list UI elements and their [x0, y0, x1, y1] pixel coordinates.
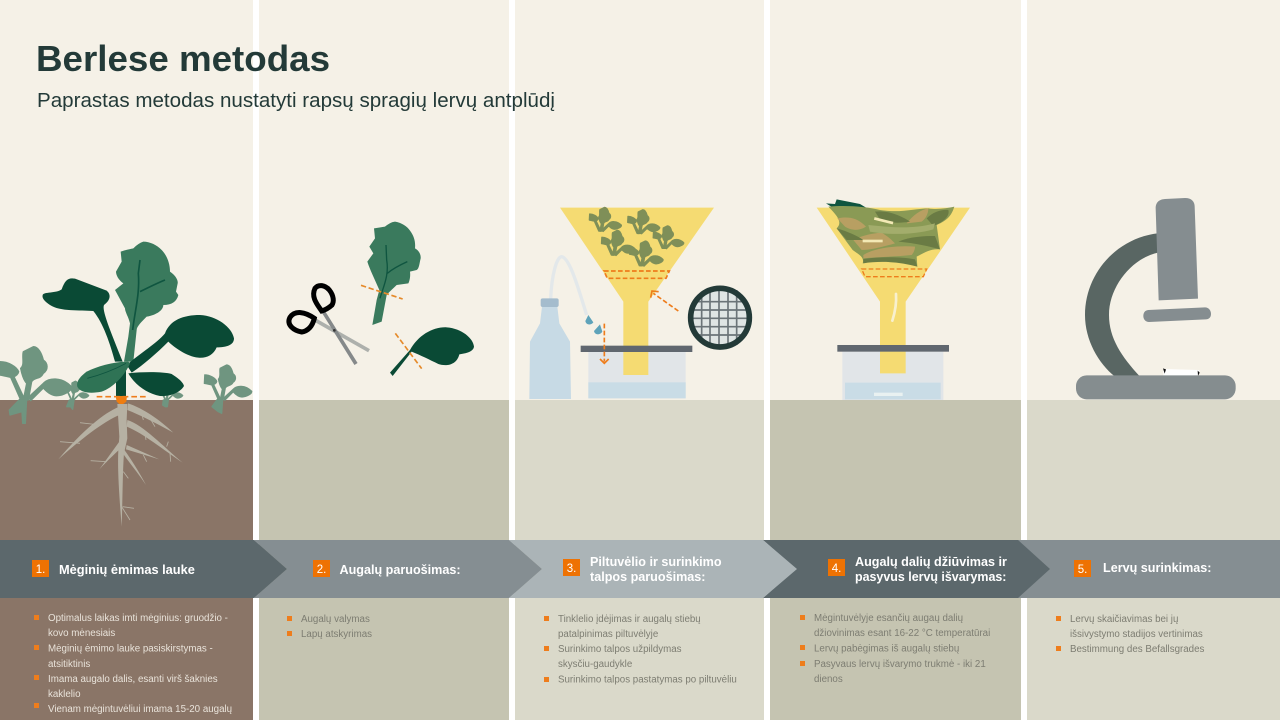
step 1 list: atsitiktinis [48, 659, 90, 670]
root collar [116, 396, 127, 404]
lower leaf [390, 327, 474, 376]
step 3 heading: Piltuvėlio ir surinkimo [590, 555, 722, 569]
plants in funnel [589, 208, 684, 266]
sieve [691, 288, 749, 347]
step 4 list: džiovinimas esant 16-22 °C temperatūrai [814, 628, 990, 639]
slide with larva [1163, 368, 1200, 376]
illustration: drying funnel with plant parts [817, 199, 970, 400]
lid [837, 345, 949, 352]
step 2 heading [313, 560, 461, 577]
step 5 list [1056, 614, 1205, 655]
step 4 heading: pasyvus lervų išvarymas: [855, 570, 1006, 584]
step 3 heading: 3. [567, 563, 576, 575]
step 2 list: Lapų atskyrimas [301, 629, 372, 640]
sieve position in funnel [604, 271, 669, 278]
step 3 list [544, 614, 737, 686]
step 4 list: Lervų pabėgimas iš augalų stiebų [814, 644, 959, 654]
bottle [529, 257, 587, 399]
step 3 heading: talpos paruošimas: [590, 570, 705, 584]
step 1 list: kaklelio [48, 689, 81, 700]
upper leaf [367, 222, 421, 325]
main plant roots [58, 403, 183, 527]
step 4 heading: 4. [832, 563, 841, 575]
funnel [560, 208, 714, 375]
illustration: rapeseed plant with roots [0, 242, 252, 527]
step 3 heading [563, 555, 722, 584]
microscope arm [1085, 233, 1158, 377]
step 4 heading: Augalų dalių džiūvimas ir [855, 555, 1007, 569]
step 4 list: Pasyvaus lervų išvarymo trukmė - iki 21 [814, 659, 986, 670]
lid [581, 346, 692, 352]
step 1 list [34, 613, 232, 715]
step 3 list: Tinklelio įdėjimas ir augalų stiebų [558, 614, 701, 625]
main plant lower left leaf [77, 362, 130, 393]
step 1 heading: Mėginių ėmimas lauke [59, 562, 195, 577]
step 2 list [287, 614, 372, 640]
drops [585, 315, 593, 324]
container [842, 352, 943, 400]
main plant dark left leaf [42, 278, 123, 362]
step 3 list: Surinkimo talpos užpildymas [558, 644, 682, 655]
main plant lower right leaf [128, 372, 184, 396]
process band: arrows [0, 540, 1280, 598]
step 1 list: Imama augalo dalis, esanti virš šaknies [48, 674, 218, 685]
step 5 list: Lervų skaičiavimas bei jų [1070, 614, 1178, 625]
step 4 list: dienos [814, 674, 843, 685]
step 4 heading [828, 555, 1007, 584]
step 1 list: Vienam mėgintuvėliui imama 15-20 augalų [48, 704, 232, 715]
step 5 heading [1074, 560, 1212, 577]
lower leaf cut line [395, 333, 422, 369]
step 5 heading: Lervų surinkimas: [1103, 561, 1212, 575]
step 5 list: išsivystymo stadijos vertinimas [1070, 629, 1203, 640]
illustration: scissors and separated leaves [289, 222, 474, 376]
microscope base [1076, 375, 1236, 399]
collection container [588, 352, 686, 398]
illustration: microscope [1076, 198, 1236, 399]
dried plant heap [826, 199, 954, 267]
scissors [289, 286, 369, 364]
small plants beside the main plant [0, 347, 252, 423]
microscope stage [1143, 307, 1211, 322]
cut line [97, 394, 147, 399]
sieve position in funnel [862, 269, 927, 277]
arrow: liquid into container [600, 324, 609, 363]
step 4 list: Mėgintuvėlyje esančių augaų dalių [814, 613, 963, 624]
step 3 list: patalpinimas piltuvėlyje [558, 629, 658, 640]
step 2 heading: Augalų paruošimas: [340, 563, 461, 577]
illustration: funnel, sieve, bottle and collection container [529, 208, 749, 399]
step 1 list: Optimalus laikas imti mėginius: gruodžio - [48, 613, 228, 624]
step 3 list: skysčiu-gaudykle [558, 659, 632, 670]
step 3 list: Surinkimo talpos pastatymas po piltuvėliu [558, 674, 737, 686]
step 2 list: Augalų valymas [301, 614, 370, 625]
step 5 list: Bestimmung des Befallsgrades [1070, 644, 1205, 655]
funnel [817, 208, 970, 373]
microscope tube [1156, 198, 1198, 300]
step 1 list: Mėginių ėmimo lauke pasiskirstymas - [48, 644, 213, 654]
step 2 heading: 2. [317, 564, 326, 576]
upper leaf cut line [361, 285, 403, 299]
main plant dark right leaf [127, 315, 234, 373]
step 4 list [800, 613, 990, 685]
step 5 heading: 5. [1078, 564, 1087, 576]
arrow: sieve to funnel [651, 291, 678, 311]
larva [892, 294, 896, 321]
subtitle: Paprastas metodas nustatyti rapsų spragių lervų antplūdį [37, 90, 555, 112]
title: Berlese metodas [36, 38, 330, 79]
main plant centre leaf [115, 242, 178, 362]
step 1 heading: 1. [36, 564, 45, 576]
step 1 list: kovo mėnesiais [48, 628, 115, 639]
main plant stem [116, 370, 126, 398]
